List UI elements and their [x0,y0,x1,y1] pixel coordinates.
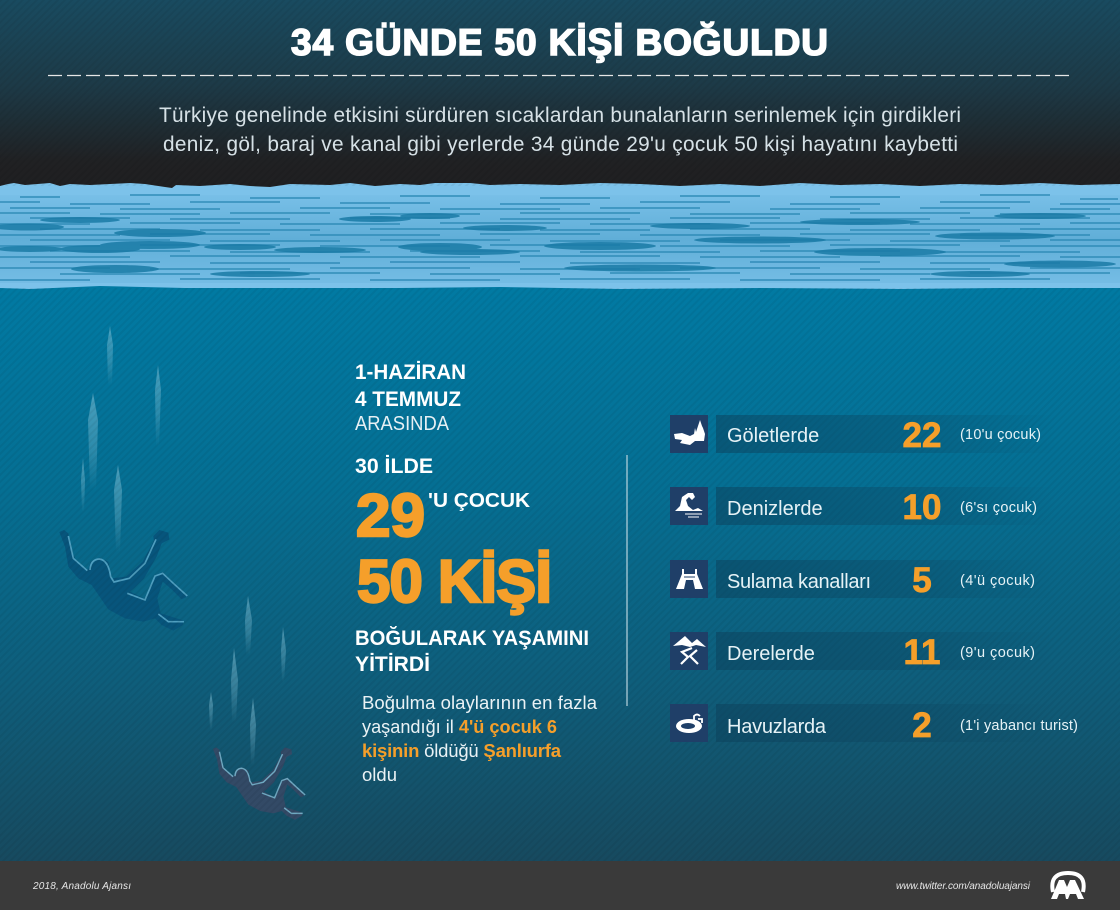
summary text block [355,361,598,785]
row: Derelerde: (9'u çocuk) [960,645,1035,661]
row: Havuzlarda: (1'i yabancı turist) [960,718,1078,734]
subtitle [159,104,961,156]
summary text block: 1-HAZİRAN [355,361,466,384]
summary text block: 50 KİŞİ [357,548,552,615]
row: Havuzlarda [670,704,1078,745]
summary text block: 29 [356,482,425,549]
icon: pond [670,415,708,453]
footer [0,861,1120,910]
summary text block: ARASINDA [355,413,450,435]
row: Göletlerde: (10'u çocuk) [960,427,1041,443]
summary text block: YİTİRDİ [355,653,430,676]
divider [626,455,628,706]
icon: Anadolu Agency logo [1051,873,1084,899]
light shafts: rising bubbles [81,326,286,765]
row: Derelerde: 11 [904,633,940,672]
row: Sulama kanalları: (4'ü çocuk) [960,573,1035,589]
icon: wave [670,487,708,525]
row: Derelerde: Derelerde [727,643,815,665]
summary text block: 'U ÇOCUK [428,490,531,512]
row: Denizlerde: Denizlerde [727,498,823,520]
figure: drowning person, lower [213,747,306,820]
summary text block: 4 TEMMUZ [355,388,461,411]
subtitle: deniz, göl, baraj ve kanal gibi yerlerde 34 günde 29'u çocuk 50 kişi hayatını kaybetti [163,133,958,156]
summary text block: yaşandığı il 4'ü çocuk 6 [362,716,557,737]
icon: canal bridge [670,560,708,598]
summary text block: oldu [362,764,397,785]
row: Göletlerde: 22 [903,416,941,455]
summary text block: Boğulma olaylarının en fazla [362,692,598,713]
summary text block: 30 İLDE [355,455,433,478]
row: Sulama kanalları: 5 [912,561,932,600]
row: Havuzlarda: 2 [912,706,932,745]
figure: drowning person, upper [59,530,188,631]
background: underwater [0,285,1120,863]
row: Göletlerde: Göletlerde [727,425,819,447]
row: Havuzlarda: Havuzlarda [727,716,827,738]
row: Göletlerde [670,415,1056,455]
footer: www.twitter.com/anadoluajansi [896,881,1031,892]
row: Denizlerde: (6'sı çocuk) [960,500,1037,516]
summary text block: kişinin öldüğü Şanlıurfa [362,740,562,761]
row: Derelerde [670,632,1056,672]
row: Sulama kanalları: Sulama kanalları [727,571,871,593]
subtitle: Türkiye genelinde etkisini sürdüren sıcaklardan bunalanların serinlemek için girdikleri [159,104,961,127]
background: dark sky [0,0,1120,190]
texture: diagonal stripes [0,0,1120,186]
summary text block: BOĞULARAK YAŞAMINI [355,626,589,650]
row: Denizlerde [670,487,1056,527]
row: Sulama kanalları [670,560,1056,600]
water surface band [0,183,1120,289]
title: 34 GÜNDE 50 KİŞİ BOĞULDU [291,22,828,63]
row: Denizlerde: 10 [903,488,941,527]
icon: stream and mountains [670,632,708,670]
icon: pool [670,704,708,742]
footer: 2018, Anadolu Ajansı [32,881,131,892]
